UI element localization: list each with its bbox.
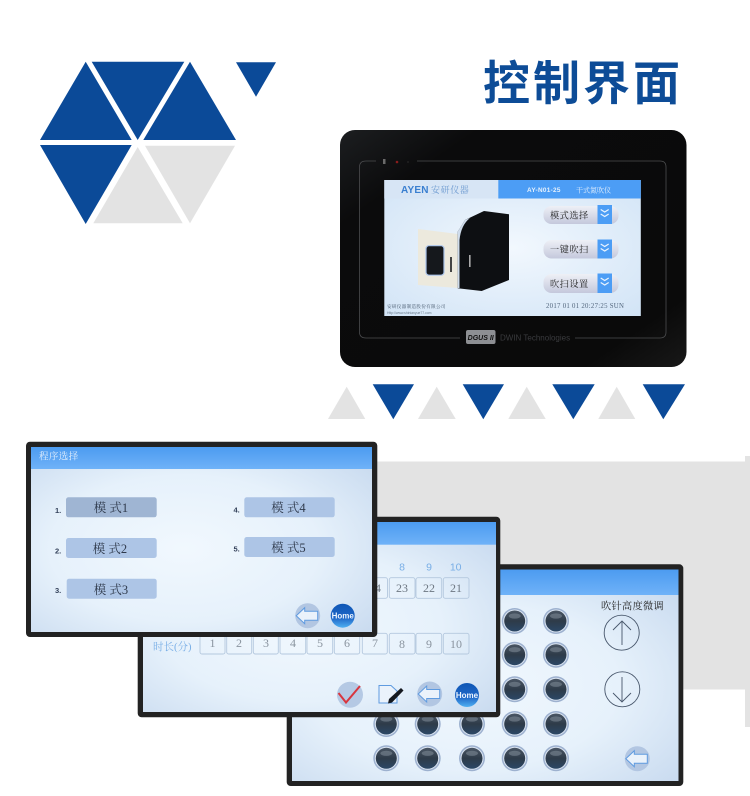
mode 1: 模 式1 [94, 500, 128, 515]
duration cells [200, 633, 469, 654]
mode 2: 2. [55, 546, 61, 556]
position numbers: 10 [450, 562, 462, 574]
position cell values: 24 [369, 581, 381, 595]
mode 3: 3. [55, 586, 61, 595]
title: 控制界面 [483, 57, 683, 110]
device screen: 干式氮吹仪 [576, 186, 611, 194]
icon: up arrow [604, 615, 639, 650]
duration cell values: 2 [236, 636, 242, 650]
screen button: blow settings: 吹扫设置 [550, 278, 589, 289]
mode 3: 模 式3 [94, 582, 128, 597]
screen button: one-key blow: 一键吹扫 [550, 244, 589, 254]
icon: back arrow [295, 603, 320, 628]
position numbers: 8 [399, 562, 405, 574]
screen title: 程序选择 [39, 450, 79, 462]
icon: small blue triangle [236, 62, 276, 97]
position cell values [369, 581, 462, 595]
mode 1 [55, 497, 157, 517]
screen company text: 安研仪器制造股份有限公司 [387, 303, 446, 310]
icon: back arrow [417, 682, 442, 706]
device indicator lights [383, 159, 409, 164]
device badge: DGUS II [466, 330, 570, 344]
mode 2 [55, 538, 157, 558]
screen company text: Http://www.shinianyue77.com [387, 311, 432, 315]
screen model label: AY-N01-25 [527, 187, 561, 194]
machine image [418, 211, 509, 291]
mode 4: 模 式4 [271, 500, 306, 515]
position cell values: 23 [396, 581, 408, 595]
duration cell values: 4 [290, 636, 296, 650]
screen button: one-key blow [544, 240, 618, 258]
device badge: DGUS II: DGUS II [468, 335, 495, 342]
mode 5: 模 式5 [271, 540, 306, 555]
icon: down arrow [605, 672, 640, 707]
duration cell values: 8 [399, 637, 405, 651]
icon: home button [455, 683, 479, 707]
position cell values: 21 [450, 581, 462, 595]
screen brand: AYEN [401, 185, 429, 196]
screen button: blow settings [544, 274, 618, 293]
device screen [384, 180, 641, 316]
device badge: DGUS II: DWIN Technologies [500, 334, 570, 342]
icon: home button: Home [332, 612, 354, 621]
duration cell values: 5 [317, 636, 323, 650]
screen button: mode select [544, 205, 618, 224]
mode 1: 1. [55, 506, 61, 515]
screen date: 2017 01 01 20:27:25 SUN [546, 303, 624, 310]
duration cell values: 10 [450, 637, 462, 651]
background band: grey [370, 456, 750, 727]
duration cell values: 3 [263, 636, 269, 650]
position cell values: 22 [423, 581, 435, 595]
duration cell values: 6 [344, 636, 350, 650]
duration cell values: 9 [426, 637, 432, 651]
device inner outline [360, 161, 666, 338]
icon: back arrow [625, 746, 650, 771]
duration cell values [210, 636, 462, 651]
triangle row [328, 384, 685, 419]
icon: home button [331, 604, 355, 628]
duration label: 时长(分) [153, 640, 192, 653]
needle height label: 吹针高度微调 [601, 600, 664, 612]
mode 3 [55, 579, 157, 599]
duration cell values: 1 [210, 636, 216, 650]
position cells [362, 578, 469, 598]
position numbers: 9 [426, 562, 432, 574]
mode 5: 5. [234, 544, 240, 554]
mode 5 [234, 537, 335, 557]
screen button: mode select: 模式选择 [550, 210, 589, 220]
icon: edit document [379, 686, 404, 704]
device: control panel [340, 130, 686, 367]
mode 2: 模 式2 [93, 541, 127, 556]
icon: home button: Home [456, 691, 479, 700]
screen company text [387, 303, 446, 315]
position numbers [399, 562, 462, 574]
icon: confirm check [337, 682, 363, 708]
device screen: 安研仪器 [431, 184, 469, 195]
needle indicator grid [373, 608, 569, 771]
duration cell values: 7 [372, 636, 378, 650]
panel: needle height screen [287, 564, 683, 786]
mode 4: 4. [234, 506, 240, 514]
panel: program select screen [26, 442, 377, 637]
mode 4 [234, 497, 335, 517]
icon: hexagon of triangles [40, 62, 236, 224]
panel: time settings screen [138, 517, 500, 717]
